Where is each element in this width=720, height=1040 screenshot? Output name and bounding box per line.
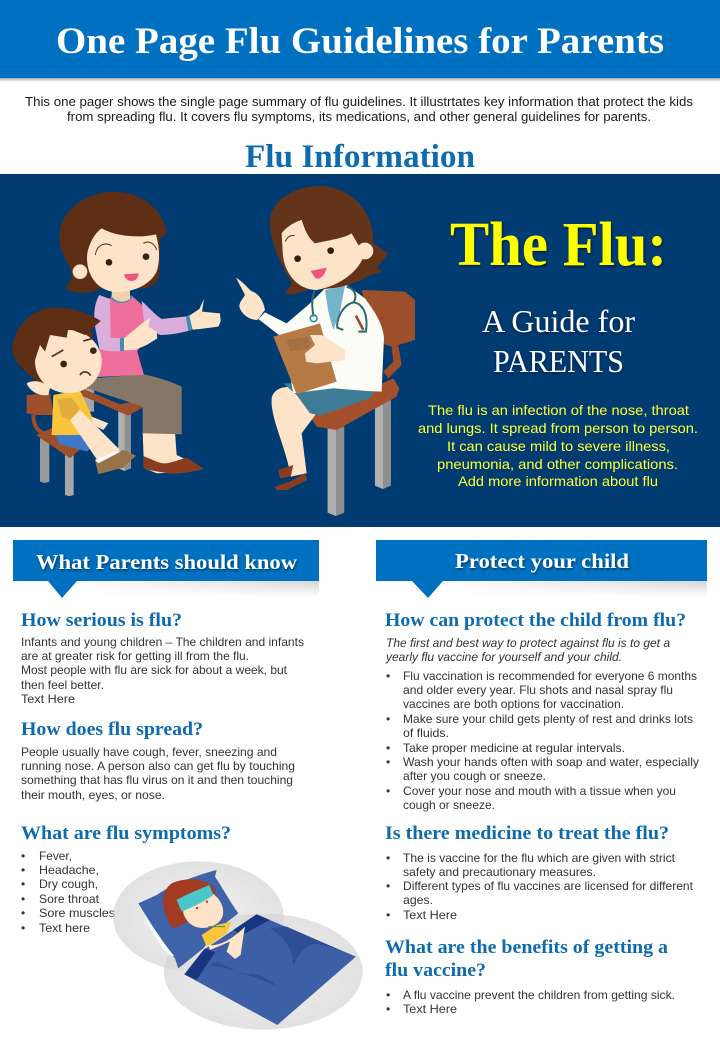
section: benefits of flu vaccine: A flu vaccine prevent the children from getting sick. [403, 988, 675, 1002]
section: flu symptoms: Dry cough, [39, 877, 98, 891]
child lying down [163, 879, 245, 959]
banner description: pneumonia, and other complications. [437, 456, 678, 472]
illustration: sick child in bed [113, 861, 363, 1030]
section: flu symptoms: • [21, 877, 25, 891]
section: how serious is flu: then feel better. [21, 678, 104, 692]
section: how can protect the child: Wash your hands often with soap and water, especially [403, 755, 699, 769]
section: flu symptoms [21, 823, 231, 935]
section: medicine to treat the flu: The is vaccine for the flu which are given with strict [403, 851, 676, 865]
section: benefits of flu vaccine: What are the benefits of getting a [385, 937, 669, 958]
banner subtitle: A Guide for [482, 303, 635, 339]
panel: flu banner [0, 174, 720, 527]
banner title: The Flu: [450, 211, 667, 279]
banner subtitle [482, 303, 635, 379]
section: how can protect the child: Make sure your child gets plenty of rest and drinks lots [403, 712, 693, 726]
header bar [0, 0, 720, 82]
section: how can protect the child: yearly flu vaccine for yourself and your child. [385, 650, 622, 664]
section: how serious is flu [21, 610, 304, 706]
banner description: It can cause mild to severe illness, [447, 438, 670, 454]
section: flu symptoms: What are flu symptoms? [21, 823, 231, 844]
section: how serious is flu: are at greater risk for getting ill from the flu. [21, 649, 249, 663]
section: how serious is flu: Infants and young children – The children and infants [21, 635, 304, 649]
blanket [184, 914, 356, 1025]
mother [59, 192, 221, 474]
heading: Flu Information: Flu Information [245, 139, 475, 175]
section: flu symptoms: Fever, [39, 849, 72, 863]
section: benefits of flu vaccine: flu vaccine? [385, 960, 486, 981]
section: how does flu spread: People usually have cough, fever, sneezing and [21, 745, 277, 759]
intro text: from spreading flu. It covers flu symptoms, its medications, and other general guidelines for parents. [67, 110, 651, 124]
section: how can protect the child: cough or sneeze. [403, 798, 495, 812]
banner description [418, 402, 698, 489]
section: flu symptoms: • [21, 906, 25, 920]
section: how does flu spread: running nose. A person also can get flu by touching [21, 759, 295, 773]
section: how can protect the child: vaccines are both options for vaccination. [403, 697, 624, 711]
section: flu symptoms: Headache, [39, 863, 99, 877]
section: how can protect the child: • [386, 712, 390, 726]
section: medicine to treat the flu [385, 823, 694, 922]
section: medicine to treat the flu: Text Here [403, 908, 457, 922]
banner description: and lungs. It spread from person to person. [418, 420, 698, 436]
pillow [138, 870, 238, 968]
section: medicine to treat the flu: • [386, 879, 390, 893]
section: how can protect the child: • [386, 784, 390, 798]
section: medicine to treat the flu: • [386, 908, 390, 922]
banner description: The flu is an infection of the nose, throat [428, 402, 689, 418]
section: how can protect the child: after you cough or sneeze. [403, 769, 546, 783]
section: medicine to treat the flu: ages. [403, 893, 433, 907]
section: how can protect the child: Cover your nose and mouth with a tissue when you [403, 784, 676, 798]
section: how does flu spread: something that has flu virus on it and then touching [21, 773, 293, 787]
banner description: Add more information about flu [458, 473, 658, 489]
section: how can protect the child: • [386, 741, 390, 755]
section: how can protect the child [385, 610, 699, 812]
section: medicine to treat the flu: Different types of flu vaccines are licensed for different [403, 879, 694, 893]
section: flu symptoms: Sore muscles [39, 906, 115, 920]
section: flu symptoms: • [21, 892, 25, 906]
ribbon: Protect your child: Protect your child [455, 549, 629, 573]
section: how can protect the child: and older every year. Flu shots and nasal spray flu [403, 683, 673, 697]
section: how does flu spread: How does flu spread? [21, 719, 203, 740]
title: One Page Flu Guidelines for Parents [56, 21, 664, 62]
ribbon: What Parents should know: What Parents should know [36, 550, 298, 574]
section: flu symptoms: Text here [39, 921, 90, 935]
section: flu symptoms: Sore throat [39, 892, 100, 906]
section: how can protect the child: • [386, 755, 390, 769]
child [12, 308, 136, 496]
section: benefits of flu vaccine: • [386, 1002, 390, 1016]
section: flu symptoms: • [21, 921, 25, 935]
section: benefits of flu vaccine: • [386, 988, 390, 1002]
section: medicine to treat the flu: • [386, 851, 390, 865]
section: how can protect the child: Take proper medicine at regular intervals. [403, 741, 625, 755]
section: medicine to treat the flu: safety and precautionary measures. [403, 865, 596, 879]
section: how can protect the child: How can protect the child from flu? [385, 610, 686, 631]
section: how can protect the child: of fluids. [403, 726, 449, 740]
section: how does flu spread [21, 719, 295, 802]
intro text [25, 95, 693, 124]
section: flu symptoms: • [21, 849, 25, 863]
section: how serious is flu: Text Here [21, 692, 75, 706]
doctor [236, 186, 388, 490]
ribbon: Protect your child [376, 540, 707, 598]
section: how can protect the child: Flu vaccination is recommended for everyone 6 months [403, 669, 697, 683]
section: how can protect the child: • [386, 669, 390, 683]
intro text: This one pager shows the single page summary of flu guidelines. It illustrtates key information that protect the kids [25, 95, 693, 109]
banner subtitle: PARENTS [493, 343, 624, 379]
section: how can protect the child: The first and best way to protect against flu is to get a [386, 636, 670, 650]
section: how serious is flu: How serious is flu? [21, 610, 182, 631]
section: benefits of flu vaccine: Text Here [403, 1002, 457, 1016]
ribbon: What Parents should know [13, 540, 319, 598]
section: medicine to treat the flu: Is there medicine to treat the flu? [385, 823, 669, 844]
section: benefits of flu vaccine [385, 937, 675, 1016]
section: how serious is flu: Most people with flu are sick for about a week, but [21, 663, 288, 677]
section: how does flu spread: their mouth, eyes, or nose. [21, 788, 165, 802]
mother's chair [82, 388, 146, 471]
section: flu symptoms: • [21, 863, 25, 877]
doctor's chair [310, 290, 415, 516]
illustration: mother, child and doctor [12, 186, 415, 516]
